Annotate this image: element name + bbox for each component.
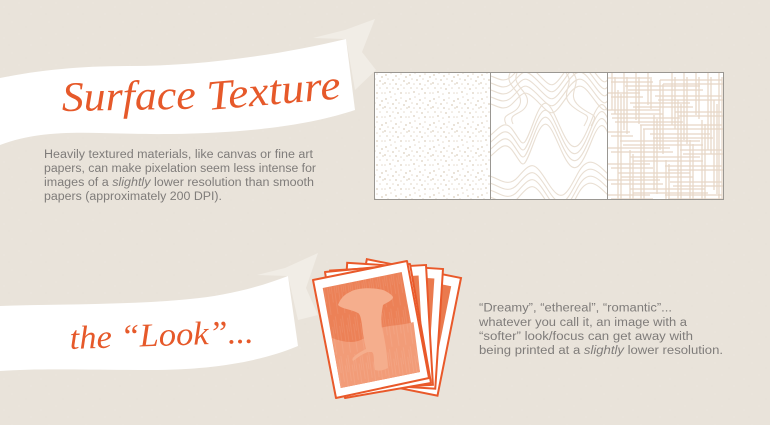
banner tail bbox=[257, 253, 318, 320]
text block: the look: “Dreamy”, “ethereal”, “romantic”... bbox=[479, 302, 672, 314]
card behind front print bbox=[325, 264, 431, 398]
text block: the look: being printed at a slightly lower resolution. bbox=[479, 345, 723, 357]
text block: surface texture: images of a slightly lower resolution than smooth bbox=[44, 177, 314, 189]
text block: surface texture: Heavily textured materials, like canvas or fine art bbox=[44, 149, 314, 161]
heading: surface texture: Surface bbox=[61, 73, 196, 121]
banner: the look bbox=[0, 253, 318, 371]
swatch frames bbox=[374, 72, 724, 200]
text block: the look: whatever you call it, an image with a bbox=[478, 317, 688, 329]
icon: fanned photo prints bbox=[313, 259, 461, 398]
heading: surface texture bbox=[61, 62, 342, 121]
text block: the look bbox=[478, 302, 723, 357]
swatch: contour texture bbox=[491, 73, 607, 199]
heading: surface texture: Texture bbox=[205, 62, 342, 120]
banner: surface texture bbox=[0, 19, 376, 145]
text block: surface texture: papers (approximately 200 DPI). bbox=[44, 191, 222, 203]
front photo print bbox=[313, 261, 429, 398]
text block: the look: “softer” look/focus can get away with bbox=[479, 331, 693, 343]
text block: surface texture: papers, can make pixelation seem less intense for bbox=[44, 163, 316, 175]
umbrella figure silhouette bbox=[338, 288, 393, 371]
banner tail bbox=[313, 19, 376, 90]
text block: surface texture bbox=[44, 149, 316, 203]
swatch: speckled texture bbox=[375, 73, 491, 199]
banner ribbon bbox=[0, 39, 355, 145]
panel: texture swatches bbox=[374, 72, 724, 200]
swatch: crosshatch texture bbox=[608, 73, 725, 203]
banner ribbon bbox=[0, 276, 298, 371]
heading: the look: the “Look”... bbox=[69, 315, 254, 357]
